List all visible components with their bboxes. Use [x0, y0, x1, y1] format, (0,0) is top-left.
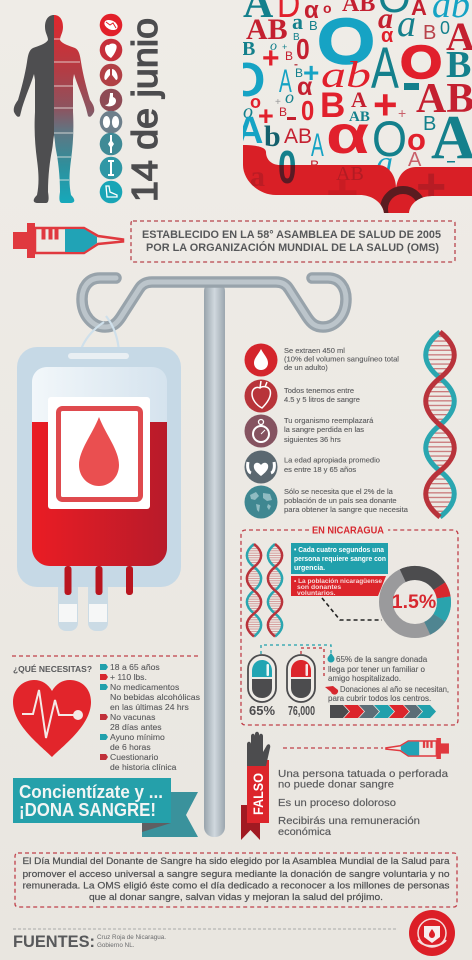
blood type letters collage: α	[381, 25, 394, 47]
blood type letters collage: B	[293, 32, 300, 43]
fact age: es entre 18 y 65 años	[284, 465, 356, 474]
blood type letters collage: O	[400, 36, 442, 88]
blood type letters collage: +	[282, 42, 287, 52]
blood bag	[17, 316, 181, 631]
logo	[409, 910, 455, 956]
blood type letters collage: A	[351, 87, 367, 112]
blood type letters collage: O	[228, 54, 265, 107]
icon: foot	[100, 181, 122, 203]
blood type letters collage: a	[378, 2, 393, 35]
blood type letters collage: AB	[349, 109, 370, 125]
teal callout: persona requiere sangre con	[294, 556, 386, 563]
fact litres: 4.5 y 5 litros de sangre	[284, 395, 360, 404]
panel: closing paragraph: que al donar sangre, salvan vidas y mejoran la salud del prójimo.	[89, 892, 383, 902]
banner: Dona sangre: ¡DONA SANGRE!	[19, 800, 156, 820]
blood type letters collage: AB	[284, 125, 312, 148]
myths list: Una persona tatuada o perforada	[278, 769, 448, 780]
blood type letters collage	[243, 0, 472, 170]
myths list	[278, 769, 448, 838]
requirements list: de historia clínica	[110, 762, 177, 772]
blood type letters collage: B	[423, 22, 436, 44]
chevron bar	[330, 705, 436, 718]
blood type letters collage: O	[372, 112, 407, 168]
requirements list: 18 a 65 años	[110, 662, 160, 672]
blood type letters collage: B	[285, 49, 293, 63]
blood type letters collage: A	[236, 110, 263, 152]
black connector	[322, 598, 382, 620]
banner: Dona sangre: Concientízate y ...	[19, 782, 163, 802]
blood type letters collage: 0	[440, 18, 450, 38]
blood type letters collage: +	[258, 101, 274, 131]
panel: closing paragraph: promover el acceso universal a sangre segura mediante la donación de sangre voluntaria y no	[22, 869, 449, 879]
red callout	[291, 576, 386, 597]
blood type letters collage: a	[292, 9, 303, 34]
blood type letters collage: O	[318, 8, 374, 75]
donut value: 1.5%	[392, 591, 436, 613]
pill 65%	[248, 655, 276, 702]
myths list: no puede donar sangre	[278, 780, 394, 790]
label FALSO: FALSO	[251, 773, 266, 815]
note donations	[328, 685, 449, 703]
teal dashed link	[261, 645, 331, 654]
panel: closing paragraph: remunerada. La OMS eligió éste como el día dedicado a reconocer a los millones de personas	[22, 880, 450, 890]
heading: EN NICARAGUA	[312, 526, 384, 536]
fact 450 ml: Se extraen 450 ml	[284, 346, 345, 355]
red bracket banner	[243, 145, 472, 213]
small DNA helices	[247, 544, 282, 636]
blood type letters collage: +	[275, 97, 281, 108]
icon: teal drop	[328, 653, 334, 662]
requirements list: Ayuno mínimo	[110, 732, 165, 742]
red callout: son donantes	[297, 584, 341, 591]
panel: En Nicaragua	[241, 526, 458, 725]
blood type letters collage: B	[242, 38, 255, 60]
blood type letters collage: 0	[278, 143, 296, 193]
blood type letters collage: o	[285, 87, 294, 107]
teal callout: urgencia.	[294, 565, 325, 572]
icon: blood drop	[79, 417, 119, 486]
icon: heart	[100, 39, 122, 61]
blood type letters collage: B	[310, 157, 319, 173]
icon: world map	[244, 486, 278, 518]
fact litres	[284, 386, 360, 404]
fact 36 hrs: la sangre perdida en las	[284, 425, 364, 434]
IV pole	[82, 278, 346, 837]
blood type letters collage: o	[243, 101, 253, 123]
blood type letters collage: o	[323, 0, 332, 16]
requirements list: No medicamentos	[110, 682, 179, 692]
red bracket banner: a	[250, 160, 265, 193]
requirements list: 28 días antes	[110, 722, 162, 732]
blood type letters collage: ab	[321, 54, 371, 95]
blood type letters collage: B	[320, 86, 345, 125]
myths list: Recibirás una remuneración	[278, 816, 420, 827]
blood type letters collage: B	[423, 113, 436, 135]
requirements list: de 6 horas	[110, 742, 151, 752]
blood type letters collage: o	[250, 92, 261, 112]
facts list	[244, 344, 409, 518]
red bracket banner: 0	[278, 143, 296, 193]
requirements list: + 110 lbs.	[110, 672, 147, 682]
sources	[13, 932, 166, 951]
organ icon column	[100, 14, 122, 203]
fact 2%: Sólo se necesita que el 2% de la	[284, 487, 394, 496]
myths list: Es un proceso doloroso	[278, 798, 396, 809]
fact 2%	[284, 487, 409, 514]
fact 450 ml: de un adulto)	[284, 363, 328, 372]
fact litres: Todos tenemos entre	[284, 386, 354, 395]
icon: kidneys	[100, 111, 122, 133]
blood type letters collage: +	[262, 42, 280, 75]
blood type letters collage: o	[407, 122, 426, 157]
pill 76,000	[287, 655, 315, 702]
red dashed link	[301, 648, 324, 678]
requirements list: No vacunas	[110, 712, 155, 722]
human body figure	[14, 15, 94, 203]
falso ribbon with hand	[241, 732, 270, 840]
blood type letters collage: B	[446, 44, 471, 86]
blood type letters collage: +	[398, 105, 406, 121]
title: 14 de junio: 14 de junio	[124, 18, 165, 202]
blood type letters collage: 0	[301, 94, 314, 126]
red callout: voluntarios.	[297, 590, 336, 597]
note 65%: amigo hospitalizado.	[328, 674, 401, 683]
icon: brain	[100, 14, 122, 36]
blood type letters collage: A	[279, 63, 292, 99]
panel: WHO establishment note: POR LA ORGANIZACIÓN MUNDIAL DE LA SALUD (OMS)	[146, 241, 439, 254]
icon: knee joint	[100, 133, 122, 155]
blood type letters collage: A	[371, 35, 399, 101]
sources: Cruz Roja de Nicaragua.	[97, 934, 166, 941]
red bracket banner: AB	[336, 163, 364, 185]
icon: stomach	[100, 89, 122, 111]
fact 450 ml: (10% del volumen sanguíneo total	[284, 354, 399, 364]
note 65%: llega por tener un familiar o	[328, 665, 425, 674]
fact 36 hrs: siguientes 36 hrs	[284, 435, 341, 444]
fact age: La edad apropiada promedio	[284, 456, 380, 464]
icon: small syringe	[386, 738, 449, 759]
value 76,000: 76,000	[288, 704, 315, 718]
blood type letters collage: B	[279, 105, 287, 119]
blood type letters collage: A	[408, 149, 422, 171]
blood type letters collage: -	[294, 57, 298, 71]
blood type letters collage: a	[376, 145, 393, 182]
sources: FUENTES:	[13, 932, 95, 951]
blood type letters collage: 0	[296, 33, 310, 65]
icon: syringe	[13, 223, 123, 258]
blood type letters collage: A	[311, 127, 324, 163]
fact 36 hrs	[284, 416, 374, 444]
note 65%	[328, 655, 428, 683]
panel: WHO establishment note	[131, 221, 455, 262]
fact age	[284, 456, 380, 474]
blood type letters collage: +	[373, 81, 398, 128]
fact 36 hrs: Tu organismo reemplazará	[284, 416, 374, 425]
icon: lungs	[100, 64, 122, 86]
fact 2%: población de un país sea donante	[284, 496, 397, 505]
value 65%: 65%	[249, 703, 275, 718]
blood type letters collage: o	[270, 39, 277, 54]
requirements list: No bebidas alcohólicas	[110, 692, 200, 702]
note 65%: 65% de la sangre donada	[336, 655, 428, 664]
icon: drop	[244, 344, 278, 376]
panel: closing paragraph: El Día Mundial del Donante de Sangre ha sido elegido por la Asamblea Mundial de la Salud para	[22, 856, 450, 866]
note donations: para cubrir todos los centros.	[328, 694, 431, 703]
blood type letters collage: α	[326, 105, 369, 165]
red bracket banner: +	[416, 158, 446, 216]
icon: bone	[100, 157, 122, 179]
requirements list	[100, 662, 200, 772]
icon: strong heart	[244, 450, 278, 484]
note donations: Donaciones al año se necesitan,	[340, 685, 449, 694]
blood type letters collage: b	[264, 120, 281, 153]
red bracket banner: +	[326, 161, 359, 224]
blood type letters collage: α	[297, 73, 313, 101]
blood type letters collage: +	[303, 57, 319, 88]
blood type letters collage: a	[397, 3, 416, 45]
icon: hand	[247, 732, 270, 766]
red callout: • La población nicaragüense	[294, 578, 382, 585]
blood type letters collage: AB	[246, 13, 288, 46]
teal callout: • Cada cuatro segundos una	[294, 547, 384, 554]
myths list: económica	[278, 827, 331, 838]
fact 450 ml	[284, 346, 399, 372]
blood type letters collage: B	[295, 66, 303, 80]
panel: closing paragraph	[15, 853, 457, 907]
fact 2%: para obtener la sangre que necesita	[284, 505, 409, 514]
teal callout	[291, 543, 388, 574]
icon: heart organ	[244, 380, 278, 412]
banner: Dona sangre	[13, 778, 198, 837]
icon: stopwatch	[244, 414, 278, 448]
sources: Gobierno NL.	[97, 942, 135, 949]
icon: heart with ECG	[13, 680, 91, 757]
panel: WHO establishment note: ESTABLECIDO EN LA 58° ASAMBLEA DE SALUD DE 2005	[142, 229, 441, 241]
icon: red drop	[325, 686, 338, 695]
DNA helix	[426, 332, 454, 517]
requirements list: Cuestionario	[110, 752, 158, 762]
blood type letters collage: B	[309, 18, 318, 33]
heading: Qué necesitas: ¿QUÉ NECESITAS?	[13, 663, 92, 674]
donut chart	[375, 562, 455, 642]
requirements list: en las últimas 24 hrs	[110, 702, 189, 712]
